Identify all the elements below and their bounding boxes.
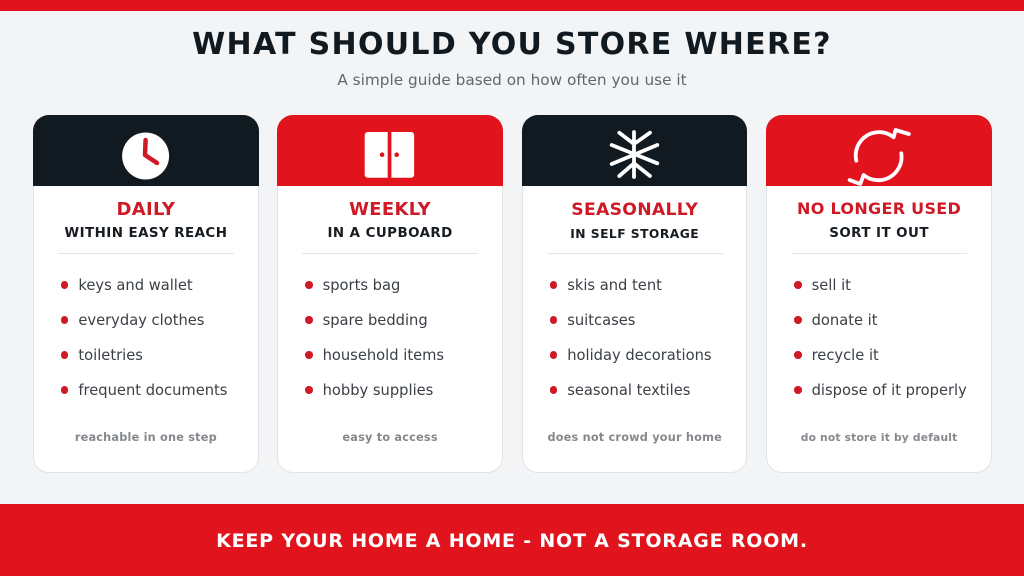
list: seasonal items: holiday decorations bbox=[567, 347, 712, 364]
heading: no longer used: NO LONGER USED bbox=[797, 199, 961, 218]
panel: seasonally bbox=[522, 115, 747, 473]
list: daily items: toiletries bbox=[78, 347, 143, 364]
icon: snowflake bbox=[522, 115, 747, 186]
list: daily items: everyday clothes bbox=[78, 312, 204, 329]
icon: recycle arrows bbox=[766, 115, 992, 186]
title: WHAT SHOULD YOU STORE WHERE? bbox=[192, 27, 832, 62]
subheading: in self storage: IN SELF STORAGE bbox=[570, 227, 699, 241]
list: seasonal items: skis and tent bbox=[567, 277, 662, 294]
list: weekly items bbox=[305, 277, 444, 399]
list: daily items bbox=[61, 277, 227, 399]
note: seasonally: does not crowd your home bbox=[547, 431, 722, 444]
subheading: within easy reach: WITHIN EASY REACH bbox=[64, 226, 227, 241]
subtitle: A simple guide based on how often you use it bbox=[337, 71, 687, 89]
top bar bbox=[0, 0, 1024, 11]
panel: no longer used bbox=[766, 115, 992, 473]
subheading: sort it out: SORT IT OUT bbox=[829, 226, 929, 241]
list: daily items: keys and wallet bbox=[78, 277, 193, 294]
list: disposal items: recycle it bbox=[812, 347, 879, 364]
panel: weekly bbox=[277, 115, 503, 473]
icon: cupboard bbox=[277, 115, 503, 186]
list: daily items: frequent documents bbox=[78, 382, 227, 399]
list: weekly items: household items bbox=[323, 347, 444, 364]
list: disposal items: sell it bbox=[812, 277, 851, 294]
list: weekly items: hobby supplies bbox=[323, 382, 433, 399]
heading: weekly: WEEKLY bbox=[349, 199, 431, 220]
footer banner bbox=[0, 504, 1024, 576]
icon: clock bbox=[33, 115, 259, 186]
list: weekly items: sports bag bbox=[323, 277, 400, 294]
subheading: in a cupboard: IN A CUPBOARD bbox=[327, 226, 453, 241]
note: weekly: easy to access bbox=[342, 431, 438, 444]
note: no longer used: do not store it by default bbox=[801, 431, 957, 444]
list: seasonal items: seasonal textiles bbox=[567, 382, 690, 399]
note: daily: reachable in one step bbox=[75, 431, 217, 444]
list: disposal items: dispose of it properly bbox=[812, 382, 967, 399]
footer text: KEEP YOUR HOME A HOME - NOT A STORAGE ROOM. bbox=[216, 530, 808, 552]
list: disposal items: donate it bbox=[812, 312, 878, 329]
heading: daily: DAILY bbox=[116, 199, 175, 220]
list: seasonal items: suitcases bbox=[567, 312, 635, 329]
panel: daily bbox=[33, 115, 259, 473]
list: seasonal items bbox=[550, 277, 712, 399]
list: disposal items bbox=[794, 277, 967, 399]
list: weekly items: spare bedding bbox=[323, 312, 428, 329]
heading: seasonally: SEASONALLY bbox=[571, 200, 698, 220]
